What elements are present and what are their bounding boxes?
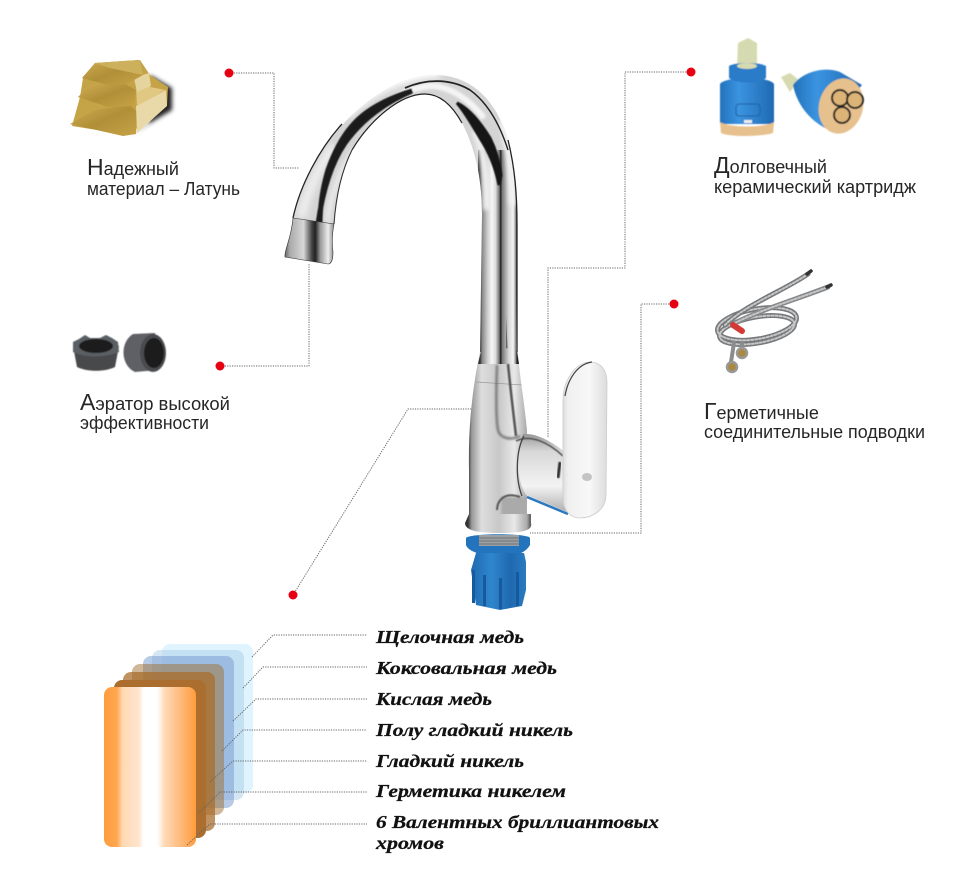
layer labels: Герметика никелем [375, 781, 566, 801]
layer 7 [162, 644, 253, 793]
label: aerator line 2: эффективности [80, 413, 209, 433]
faucet arm [518, 434, 572, 514]
faucet logo [582, 473, 592, 481]
blue mounting nut [466, 534, 530, 610]
layer labels: Щелочная медь [375, 627, 524, 647]
coating layers diagram [104, 644, 253, 847]
layer labels: 6 Валентных бриллиантовых [376, 812, 659, 832]
icon: braided hoses [715, 271, 831, 372]
label: cartridge line 2: керамический картридж [714, 177, 916, 197]
icon: aerators [73, 333, 166, 372]
faucet base ring [465, 514, 531, 533]
faucet spout [292, 75, 518, 352]
label: hoses: Герметичные [704, 398, 819, 424]
layer labels: Полу гладкий никель [375, 720, 573, 740]
label: hoses line 2: соединительные подводки [704, 422, 925, 442]
layer leader lines [187, 635, 367, 845]
cartridge upright [720, 38, 774, 136]
leader lines [220, 72, 691, 595]
icon: gold ingots [70, 60, 172, 136]
cartridge side [781, 70, 869, 139]
faucet collar [478, 348, 519, 364]
layer labels: Гладкий никель [375, 751, 524, 771]
layer 3 [123, 672, 215, 831]
layer labels [375, 627, 659, 853]
faucet tip [285, 218, 334, 264]
label: brass: Надежный [87, 154, 179, 180]
aerator front [73, 335, 119, 371]
layer 1 [104, 687, 196, 847]
aerator angled [123, 333, 166, 372]
layer 2 [114, 680, 206, 838]
faucet body reflections [476, 364, 527, 523]
layer 5 [143, 656, 234, 808]
label: aerator: Аэратор высокой [80, 389, 230, 415]
layer labels: хромов [375, 833, 444, 853]
layer labels: Коксовальная медь [375, 658, 557, 678]
faucet [285, 65, 607, 610]
layer labels: Кислая медь [375, 689, 492, 709]
faucet body [469, 352, 527, 523]
layer 6 [152, 650, 244, 800]
icon: ceramic cartridges [720, 38, 869, 139]
label: cartridge: Долговечный [714, 152, 827, 178]
faucet handle [563, 362, 607, 518]
layer 4 [132, 664, 224, 815]
label: brass line 2: материал – Латунь [87, 179, 240, 199]
red markers [216, 68, 696, 600]
